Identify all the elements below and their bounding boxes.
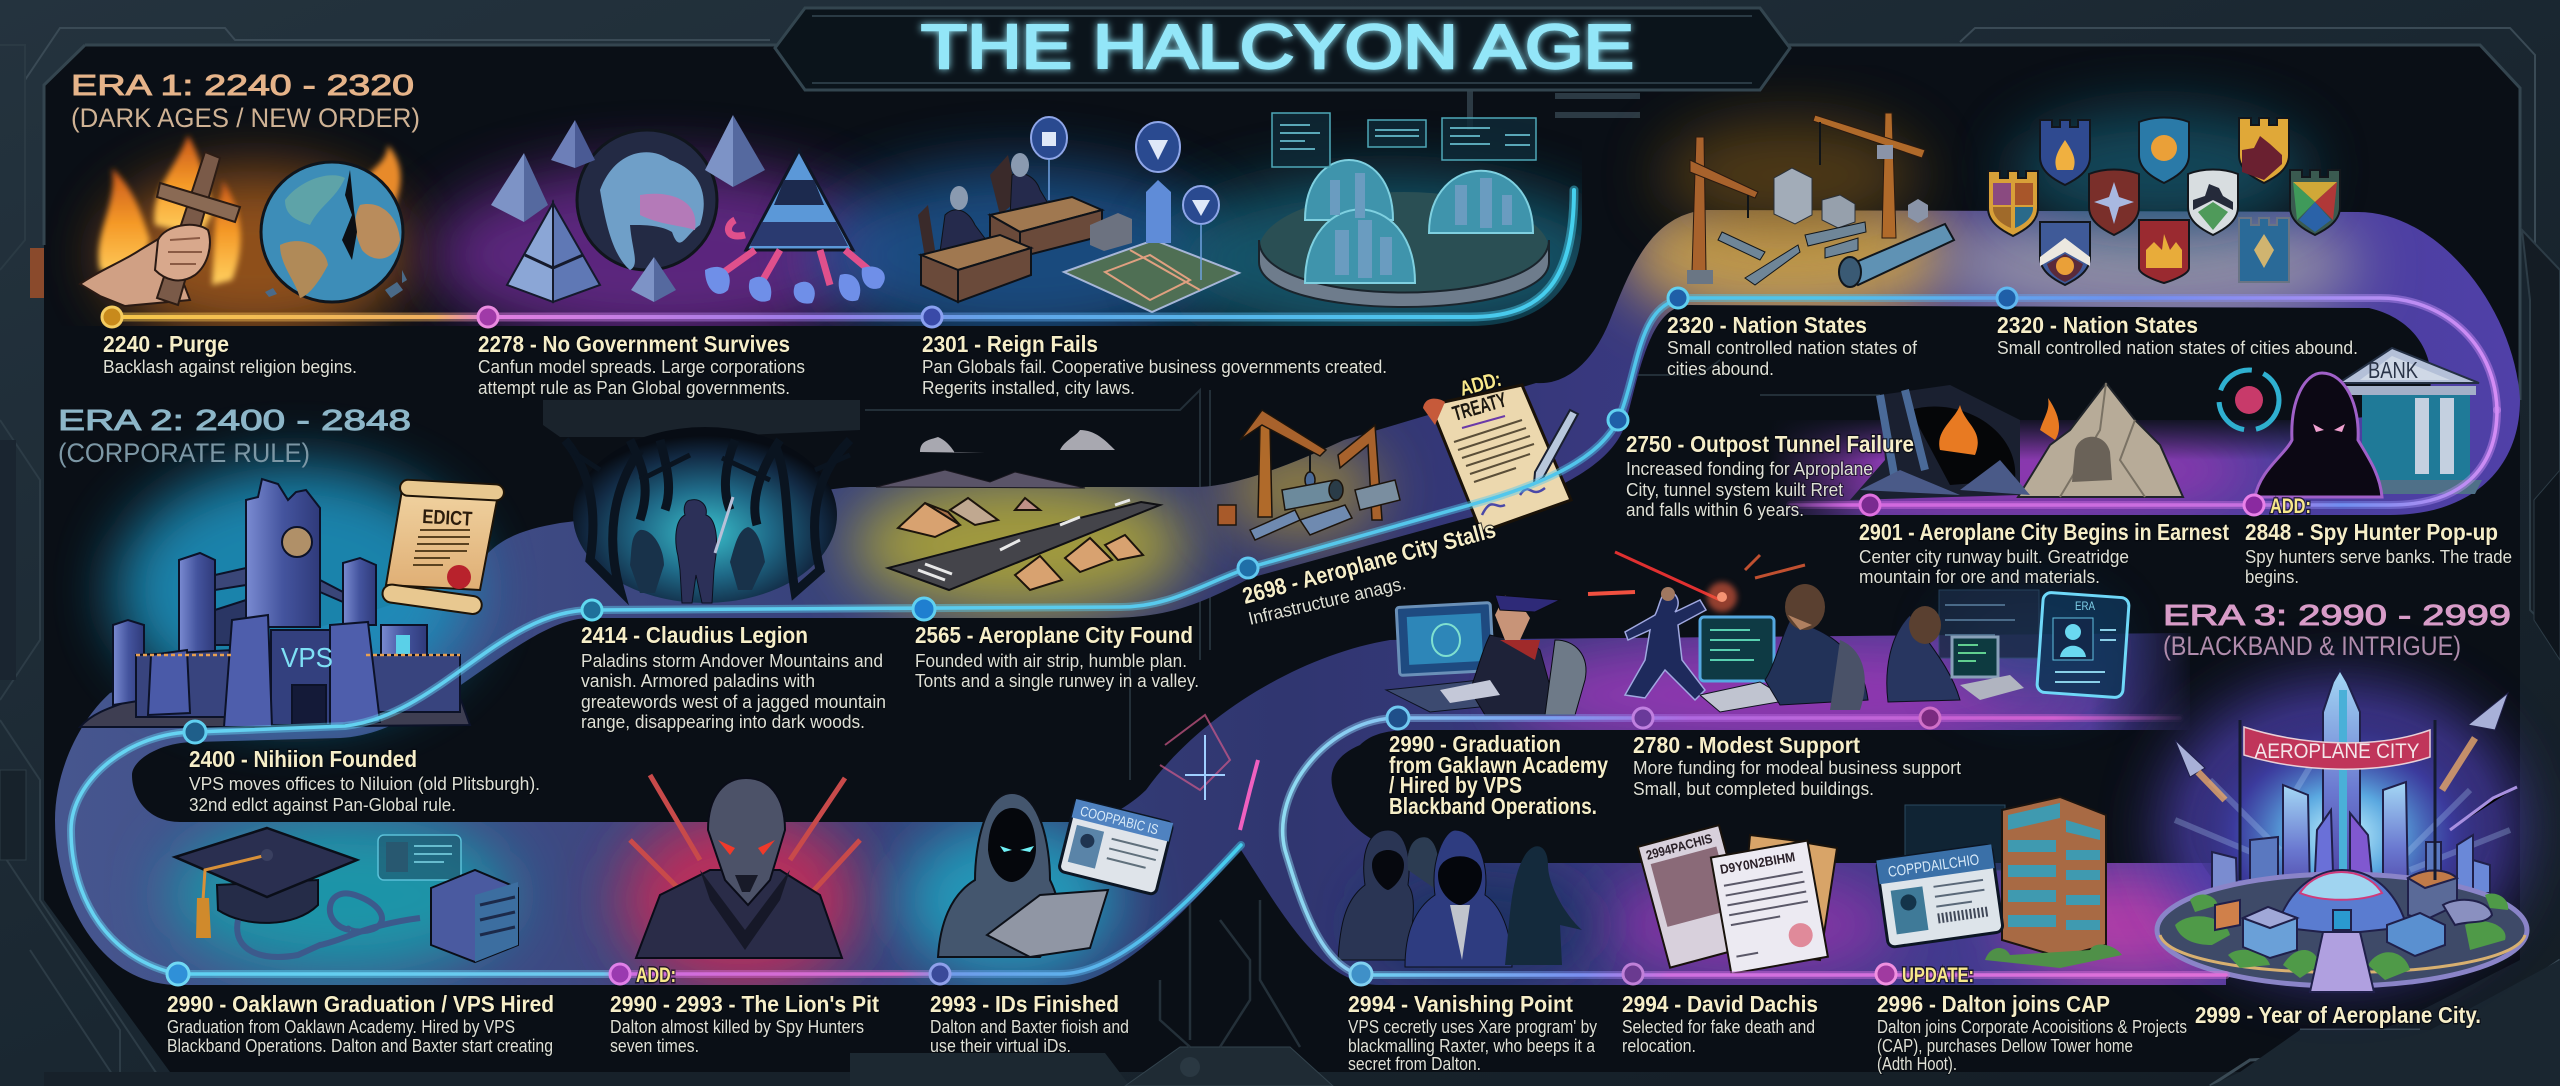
timeline: lower line to crossing [178,845,1241,974]
event: 2990 oaklawn graduation: Blackband Operations. Dalton and Baxter start creating [167,1035,553,1056]
icon: hooded hacker with corporate id [938,793,1173,957]
event: 2278 no government survives: attempt rule as Pan Global governments. [478,377,790,398]
event: 2996 dalton joins cap: (CAP), purchases Dellow Tower home [1877,1035,2133,1056]
event: 2400 nihiion founded: VPS moves offices to Niluion (old Plitsburgh). [189,773,540,794]
event: 2750 outpost tunnel failure: Increased fonding for Aproplane [1626,458,1873,479]
icon: hooded spy hunter and bank [2219,348,2482,497]
icon: graduation cap, id hologram and server [175,828,518,962]
event: 2990 graduation [1389,731,1608,819]
event: 2994 vanishing point [1348,991,1598,1074]
event: 2994 david dachis: relocation. [1622,1035,1696,1056]
icon: officer at computer [1386,595,1586,715]
event: 2400 nihiion founded: 2400 - Nihiion Founded [189,746,417,772]
icon: edict scroll [381,479,504,615]
event: 2414 claudius legion [581,622,886,732]
event: 2301 reign fails: Regerits installed, city laws. [922,377,1135,398]
event: 2565 aeroplane city found [915,622,1199,691]
event: 2780 modest support [1633,732,1961,799]
event: 2750 outpost tunnel failure: and falls within 6 years. [1626,499,1804,520]
heading: era 1 [71,70,420,133]
heading: era 3: (BLACKBAND & INTRIGUE) [2163,631,2461,661]
event: 2993 ids finished: use their virtual iDs. [930,1035,1071,1056]
event: 2320 nation states a [1667,312,1918,379]
icon: forger with digital id card: ERA [2075,599,2095,613]
label: treaty add: ADD: [1457,368,1504,401]
event: 2320 nation states a: Small controlled nation states of [1667,337,1918,358]
event: 2848 spy hunter pop-up: 2848 - Spy Hunter Pop-up [2245,519,2498,545]
event: 2414 claudius legion: range, disappearing into dark woods. [581,711,865,732]
event: 2990 graduation: from Gaklawn Academy [1389,752,1608,778]
icon: david dachis documents: 2994PACHIS [1644,831,1714,863]
event: 2301 reign fails [922,331,1387,398]
event: 2320 nation states a: cities abound. [1667,358,1774,379]
event: 2414 claudius legion: greatewords west of a jagged mountain [581,691,886,712]
glow halos [115,110,2520,980]
event: 2994 vanishing point: VPS cecretly uses Xare program' by [1348,1016,1598,1037]
icon: pyramids and world map [491,115,885,304]
icon: VPS fortress [80,479,470,727]
event: 2320 nation states b [1997,312,2358,358]
event: 2780 modest support: Small, but completed buildings. [1633,778,1874,799]
event: 2320 nation states a: 2320 - Nation States [1667,312,1867,338]
event: 2301 reign fails: 2301 - Reign Fails [922,331,1098,357]
icon: signed treaty with pen: TREATY [1450,389,1509,426]
event: 2565 aeroplane city found: 2565 - Aeroplane City Found [915,622,1193,648]
event: 2240 purge: 2240 - Purge [103,331,229,357]
sparkle crossing [1160,715,1258,830]
icon: regents at desks and holographic map [918,117,1239,312]
event: 2565 aeroplane city found: Tonts and a single runwey in a valley. [915,670,1199,691]
event: 2750 outpost tunnel failure: 2750 - Outpost Tunnel Failure [1626,431,1914,457]
title plate [775,8,1790,90]
heading: era 2: ERA 2: 2400 - 2848 [58,405,411,437]
era 1 glow band [105,165,1620,345]
event: 2301 reign fails: Pan Globals fail. Cooperative business governments created. [922,356,1387,377]
icon: shadowy hooded figures [1338,830,1582,967]
event: 2993 ids finished: 2993 - IDs Finished [930,991,1119,1017]
event: 2990 graduation: Blackband Operations. [1389,793,1597,819]
icon: david dachis documents [1638,825,1837,974]
event: 2996 dalton joins cap: (Adth Hoot). [1877,1053,1957,1074]
icon: nation-state shields [1988,118,2340,285]
icon: paladins in dark forest [565,427,850,603]
event: 2990-2993 the lion's pit: ADD: [636,964,676,987]
icon: cracked globe [261,145,407,302]
event: 2990 graduation: / Hired by VPS [1389,772,1522,798]
icon: corporate id and dellow tower [1876,797,2122,968]
heading: era 3 [2163,600,2511,661]
event: 2278 no government survives: Canfun model spreads. Large corporations [478,356,805,377]
event: 2901 aeroplane city begins [1859,519,2229,587]
event: 2990-2993 the lion's pit: 2990 - 2993 - The Lion's Pit [610,991,879,1017]
event: 2990 oaklawn graduation: Graduation from Oaklawn Academy. Hired by VPS [167,1016,515,1037]
event: 2994 vanishing point: blackmalling Raxter, who beeps it a [1348,1035,1596,1056]
event: 2565 aeroplane city found: Founded with air strip, humble plan. [915,650,1187,671]
ribbon band [55,185,2520,990]
event: 2320 nation states b: 2320 - Nation States [1997,312,2198,338]
event: 2994 david dachis: Selected for fake death and [1622,1016,1815,1037]
icon: figure under laser fire [1588,552,1720,700]
event: 2848 spy hunter pop-up [2245,495,2512,587]
timeline nodes [102,288,2264,985]
event: 2240 purge [103,331,357,377]
event: 2901 aeroplane city begins: mountain for ore and materials. [1859,566,2100,587]
event: 2698 aeroplane city stalls: 2698 - Aeroplane City Stalls [1240,516,1498,609]
icon: walled domed city-states [1259,113,1549,308]
timeline: era 3 upper line [1283,718,2180,975]
event: 2848 spy hunter pop-up: begins. [2245,566,2299,587]
heading: era 2: (CORPORATE RULE) [58,438,310,468]
event: 2780 modest support: 2780 - Modest Support [1633,732,1860,758]
icon: hooded spy hunter and bank: BANK [2368,357,2419,383]
icon: airstrip and tents [876,430,1160,590]
icon: signed treaty with pen [1423,385,1578,532]
event: 2994 david dachis [1622,991,1818,1056]
icon: lion-faced spy hunter [630,775,860,958]
event: 2990-2993 the lion's pit [610,964,879,1056]
event: 2750 outpost tunnel failure: City, tunnel system kuilt Rret [1626,479,1843,500]
event: 2240 purge: Backlash against religion begins. [103,356,357,377]
event: 2400 nihiion founded [189,746,540,815]
event: 2990 oaklawn graduation [167,991,554,1056]
icon: hooded hacker with corporate id: COOPPABIC IS [1079,803,1160,837]
icon: edict scroll: EDICT [422,506,473,531]
event: 2990 oaklawn graduation: 2990 - Oaklawn Graduation / VPS Hired [167,991,554,1017]
event: 2320 nation states b: Small controlled nation states of cities abound. [1997,337,2358,358]
event: 2996 dalton joins cap: 2996 - Dalton joins CAP [1877,991,2110,1017]
event: 2750 outpost tunnel failure [1626,431,1914,520]
icon: collapsed tunnel and mountain [1850,383,2183,500]
timeline: era 1 line [112,190,1574,317]
icon: construction cranes [1687,113,1954,287]
event: 2994 david dachis: 2994 - David Dachis [1622,991,1818,1017]
event: 2848 spy hunter pop-up: Spy hunters serve banks. The trade [2245,546,2512,567]
event: 2990-2993 the lion's pit: Dalton almost killed by Spy Hunters [610,1016,864,1037]
event: 2990 graduation: 2990 - Graduation [1389,731,1561,757]
heading: era 1: (DARK AGES / NEW ORDER) [71,103,420,133]
icon: david dachis documents: D9Y0N2BIHM [1719,849,1796,877]
icon: stalled construction [1218,410,1400,540]
icon: VPS fortress: VPS [281,642,333,673]
icon: forger with digital id card [1887,590,2129,702]
timeline: era 2 line [71,298,2497,974]
icon: corporate id and dellow tower: COPPDAILCHIO [1887,851,1980,881]
event: 2414 claudius legion: vanish. Armored paladins with [581,670,815,691]
event: 2400 nihiion founded: 32nd edlct against Pan-Global rule. [189,794,456,815]
icon: fist with burning cross [80,135,241,306]
event: 2996 dalton joins cap: UPDATE: [1902,964,1974,987]
event: 2698 aeroplane city stalls: Infrastructure anags. [1246,572,1408,629]
event: 2698 aeroplane city stalls [1240,516,1498,629]
event: 2848 spy hunter pop-up: ADD: [2270,495,2311,518]
icon: aeroplane city [2157,670,2527,992]
event: 2901 aeroplane city begins: Center city runway built. Greatridge [1859,546,2129,567]
icon: hacker with laptop [1700,555,1868,712]
event: 2278 no government survives [478,331,805,398]
icon: aeroplane city: AEROPLANE CITY [2254,740,2420,763]
event: 2901 aeroplane city begins: 2901 - Aeroplane City Begins in Earnest [1859,519,2229,545]
event: 2993 ids finished [930,991,1129,1056]
event: 2993 ids finished: Dalton and Baxter fioish and [930,1016,1129,1037]
event: 2999 year of aeroplane city: 2999 - Year of Aeroplane City. [2195,1002,2481,1028]
event: 2996 dalton joins cap [1877,964,2187,1074]
event: 2780 modest support: More funding for modeal business support [1633,757,1961,778]
event: 2278 no government survives: 2278 - No Government Survives [478,331,790,357]
heading: era 3: ERA 3: 2990 - 2999 [2163,600,2511,632]
event: 2994 vanishing point: 2994 - Vanishing Point [1348,991,1573,1017]
heading: era 2 [58,405,411,468]
event: 2996 dalton joins cap: Dalton joins Corporate Acooisitions & Projects [1877,1016,2187,1037]
heading: era 1: ERA 1: 2240 - 2320 [71,70,414,102]
title: THE HALCYON AGE [921,13,1634,82]
event: 2414 claudius legion: 2414 - Claudius Legion [581,622,808,648]
timeline: era 3 lower line [1361,971,2226,979]
event: 2990-2993 the lion's pit: seven times. [610,1035,699,1056]
event: 2414 claudius legion: Paladins storm Andover Mountains and [581,650,883,671]
event: 2994 vanishing point: secret from Dalton. [1348,1053,1481,1074]
